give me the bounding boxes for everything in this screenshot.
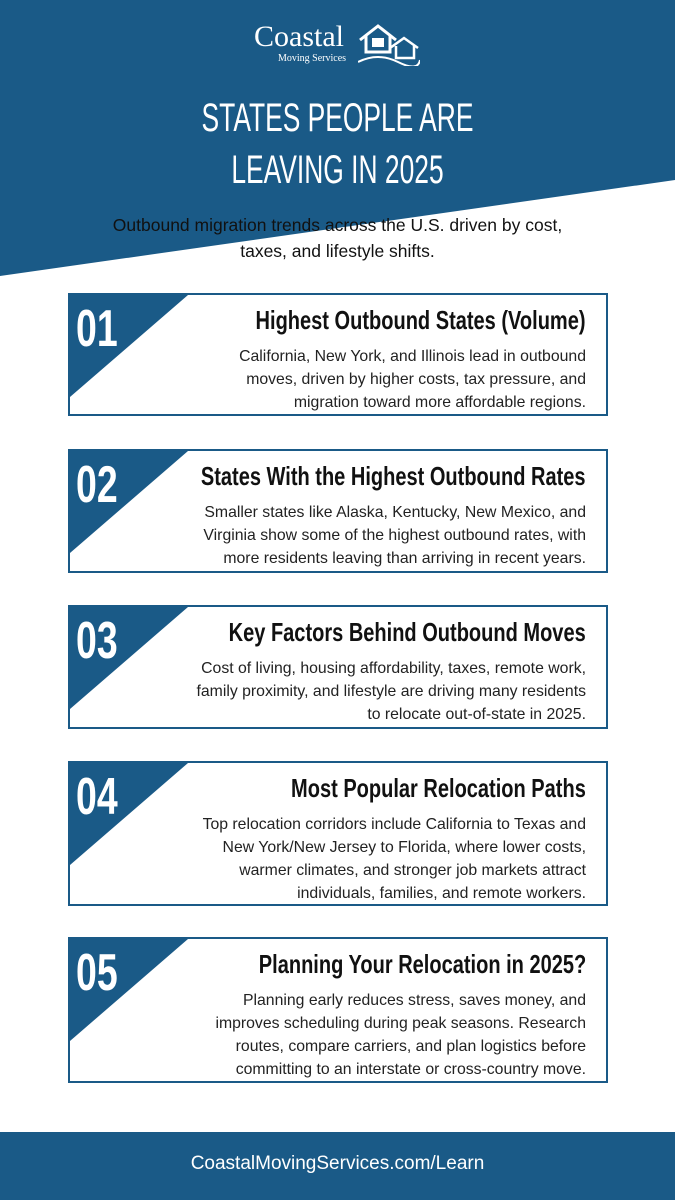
- panel: 01: [68, 293, 608, 416]
- panel: 03: 03: [76, 612, 118, 670]
- panel: 04: warmer climates, and stronger job markets attract: [239, 862, 586, 879]
- subtitle: taxes, and lifestyle shifts.: [240, 241, 435, 261]
- title: LEAVING IN 2025: [231, 148, 444, 192]
- panel: 02: 02: [76, 456, 118, 514]
- panel: 04: [68, 761, 608, 906]
- panel: 02: Virginia show some of the highest outbound rates, with: [203, 527, 586, 544]
- icon: houses: [358, 24, 420, 66]
- panel: 02: States With the Highest Outbound Rates: [201, 461, 586, 491]
- logo: [254, 20, 420, 66]
- footer: [0, 1132, 675, 1200]
- subtitle: [113, 215, 562, 261]
- panel: 03: to relocate out-of-state in 2025.: [367, 706, 586, 723]
- panel: 05: Planning Your Relocation in 2025?: [259, 949, 586, 979]
- panel: 01: Highest Outbound States (Volume): [256, 305, 586, 335]
- panel: 01: moves, driven by higher costs, tax pressure, and: [246, 371, 586, 388]
- panel: 05: Planning early reduces stress, saves money, and: [243, 992, 586, 1009]
- panel: 01: California, New York, and Illinois lead in outbound: [239, 348, 586, 365]
- panel: 05: 05: [76, 944, 118, 1002]
- subtitle: Outbound migration trends across the U.S. driven by cost,: [113, 215, 562, 235]
- title: [202, 96, 473, 192]
- panel: 01: migration toward more affordable regions.: [294, 394, 586, 411]
- header background: [0, 0, 675, 276]
- panel: 05: committing to an interstate or cross-country move.: [236, 1061, 586, 1078]
- panel: 03: Key Factors Behind Outbound Moves: [229, 617, 586, 647]
- panel: 02: [68, 449, 608, 573]
- panel: 04: Most Popular Relocation Paths: [291, 773, 586, 803]
- panel: 05: [68, 937, 608, 1083]
- panel: 04: New York/New Jersey to Florida, where lower costs,: [223, 839, 586, 856]
- panel: 03: Cost of living, housing affordability, taxes, remote work,: [201, 660, 586, 677]
- title: STATES PEOPLE ARE: [202, 96, 473, 140]
- panel: 03: family proximity, and lifestyle are driving many residents: [196, 683, 586, 700]
- panel: 04: Top relocation corridors include California to Texas and: [203, 816, 586, 833]
- panel: 05: improves scheduling during peak seasons. Research: [215, 1015, 586, 1032]
- panel: 04: 04: [76, 768, 118, 826]
- panel: 05: routes, compare carriers, and plan logistics before: [236, 1038, 586, 1055]
- panel: 02: Smaller states like Alaska, Kentucky, New Mexico, and: [204, 504, 586, 521]
- panel: 03: [68, 605, 608, 729]
- logo: Coastal: [254, 20, 344, 53]
- panel: 01: 01: [76, 300, 118, 358]
- footer: CoastalMovingServices.com/Learn: [191, 1153, 484, 1174]
- logo: Moving Services: [278, 53, 346, 64]
- panel: 02: more residents leaving than arriving in recent years.: [223, 550, 586, 567]
- panel: 04: individuals, families, and remote workers.: [297, 885, 586, 902]
